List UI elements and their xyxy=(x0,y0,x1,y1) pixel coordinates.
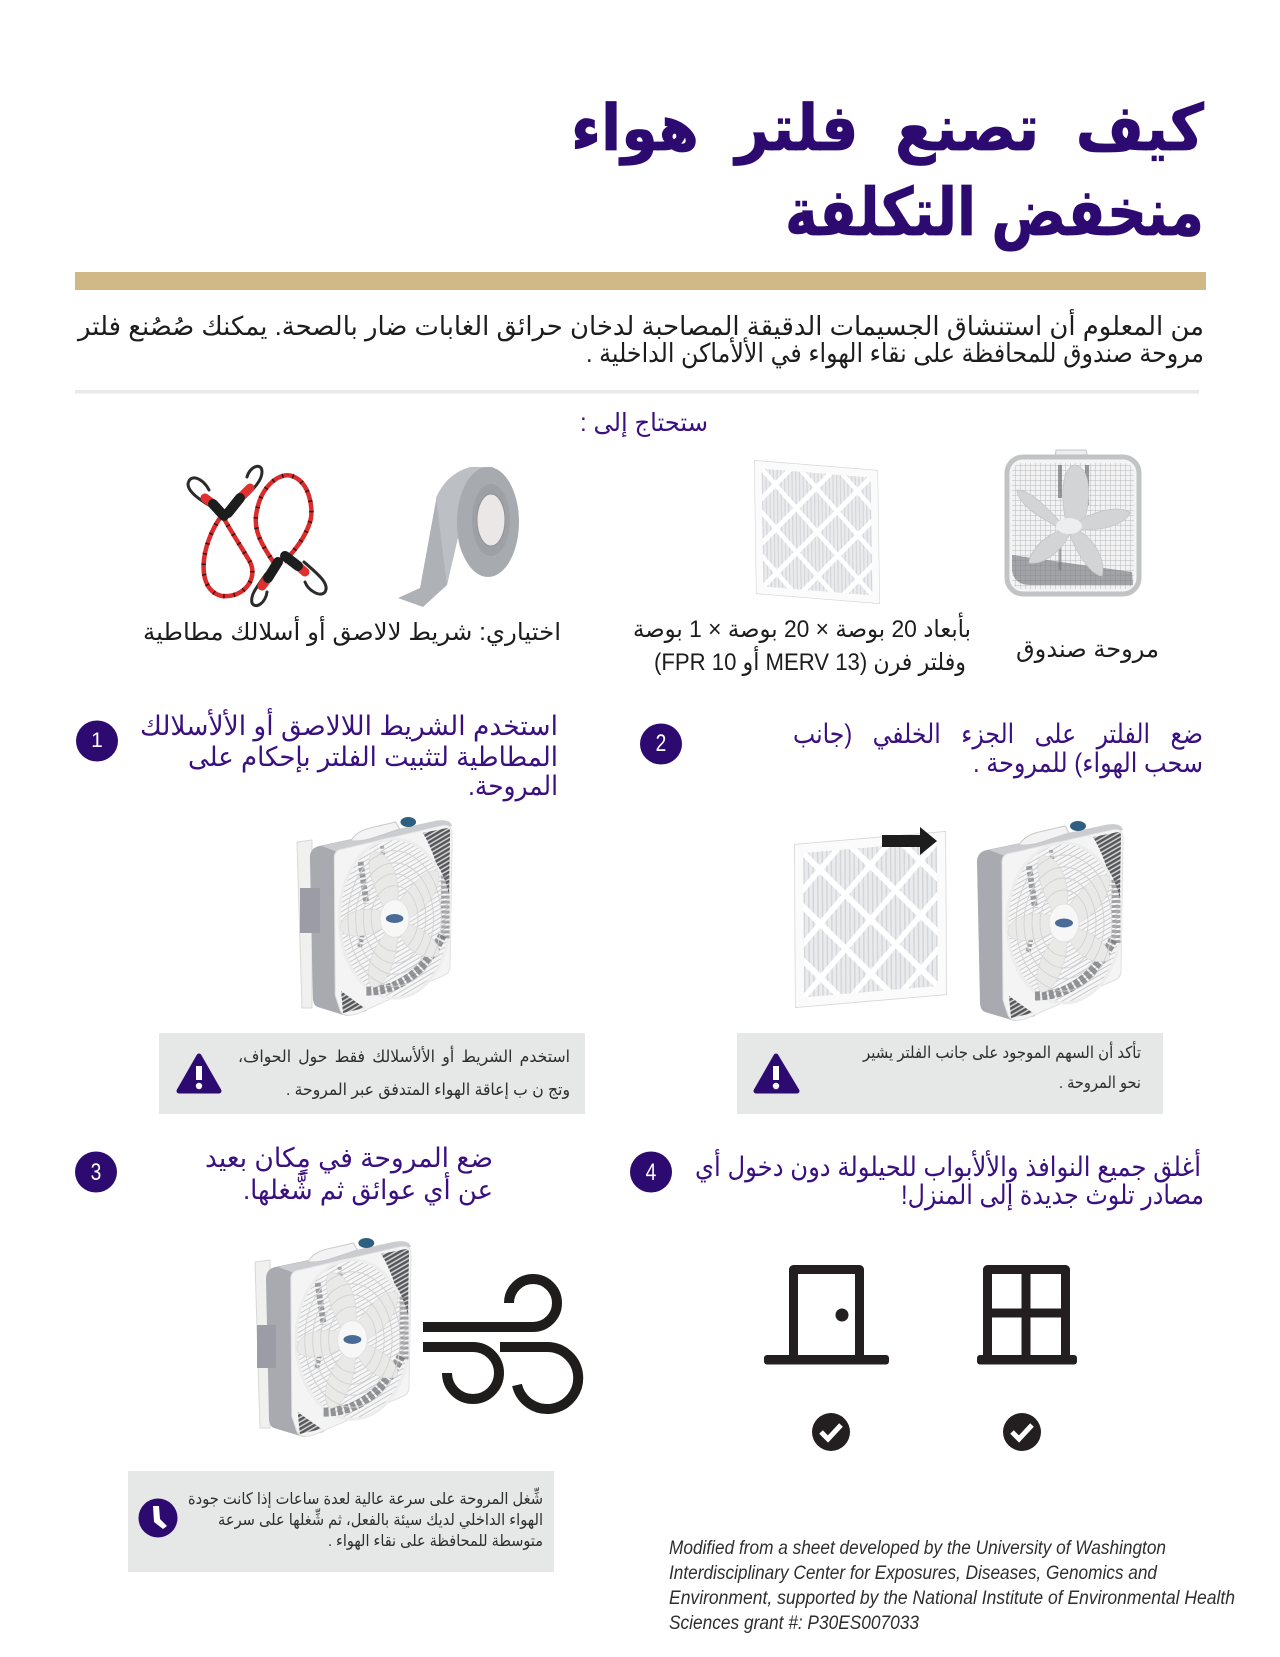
panel: materials xyxy=(143,450,1159,676)
warning box xyxy=(737,1033,1163,1114)
title: منخفض التكلفة xyxy=(785,175,1204,251)
materials heading: ستحتاج إلى : xyxy=(580,409,708,438)
panel: step 1 xyxy=(76,707,585,1114)
step 2 instruction: ضع الفلتر على الجزء الخلفي (جانب xyxy=(793,719,1203,750)
icon: check xyxy=(812,1413,850,1451)
panel: step 2 xyxy=(640,719,1203,1114)
material labels: وفلتر فرن (MERV 13 أو FPR 10) xyxy=(654,646,966,676)
warning text: وتج ن ب إعاقة الهواء المتدفق عبر المروحة . xyxy=(286,1081,570,1100)
fan with filter xyxy=(255,1238,411,1437)
title xyxy=(571,92,1205,251)
warning text: نحو المروحة . xyxy=(1059,1074,1141,1093)
note text: متوسطة للمحافظة على نقاء الهواء . xyxy=(328,1533,543,1551)
note text: الهواء الداخلي لديك سيئة بالفعل، ثم شِّغلها على سرعة xyxy=(218,1508,543,1530)
warning text xyxy=(238,1045,570,1100)
step 4 number: 4 xyxy=(646,1158,656,1186)
step 3 instruction: عن أي عوائق ثم شَّغلها. xyxy=(243,1170,493,1206)
material: bungee cords xyxy=(188,466,326,606)
panel: step 4 xyxy=(630,1148,1204,1451)
step 1 instruction: استخدم الشريط اللالاصق أو الألأسلالك xyxy=(140,707,558,742)
fan with filter attached xyxy=(297,817,452,1016)
step 1 number: 1 xyxy=(91,729,103,752)
source credit: Environment, supported by the National Institute of Environmental Health xyxy=(669,1587,1235,1609)
source credit: Sciences grant #: P30ES007033 xyxy=(669,1612,919,1634)
icon: warning triangle xyxy=(179,1056,219,1091)
step 1 instruction xyxy=(140,707,558,802)
intro paragraph xyxy=(76,308,1204,369)
step 3 instruction xyxy=(205,1143,493,1206)
step 2 number xyxy=(640,724,682,764)
icon: check xyxy=(1003,1413,1041,1451)
warning text: استخدم الشريط أو الألأسلالك فقط حول الحواف، xyxy=(238,1045,570,1067)
warning text xyxy=(862,1041,1141,1093)
step 1 instruction: المروحة. xyxy=(468,771,558,802)
material: air filter xyxy=(754,460,880,604)
step 4 instruction: مصادر تلوث جديدة إلى المنزل! xyxy=(901,1180,1204,1211)
intro paragraph: من المعلوم أن استنشاق الجسيمات الدقيقة المصاحبة لدخان حرائق الغابات ضار بالصحة. يمكنك صُصُنع فلتر xyxy=(76,308,1204,342)
source credit: Modified from a sheet developed by the University of Washington xyxy=(669,1537,1166,1559)
step 2 number: 2 xyxy=(656,729,666,757)
gold divider bar xyxy=(75,272,1206,290)
step 4 instruction xyxy=(695,1148,1204,1211)
panel: step 3 xyxy=(75,1143,578,1572)
step 3 number xyxy=(75,1152,117,1192)
intro paragraph: مروحة صندوق للمحافظة على نقاء الهواء في الألأماكن الداخلية . xyxy=(586,336,1204,369)
icon: warning triangle xyxy=(756,1056,797,1091)
note text xyxy=(188,1487,543,1551)
icon: door xyxy=(764,1270,889,1364)
icon: wind xyxy=(423,1279,578,1409)
step 3 instruction: ضع المروحة في مٍكان بعيد xyxy=(205,1143,493,1176)
material labels xyxy=(143,612,1159,676)
warning box xyxy=(159,1033,585,1114)
air filter with arrow xyxy=(794,827,947,1008)
material: duct tape xyxy=(398,467,519,607)
warning text: تأكد أن السهم الموجود على جانب الفلتر يشير xyxy=(862,1041,1141,1063)
note text: شِّغل المروحة على سرعة عالية لعدة ساعات إذا كانت جودة xyxy=(188,1487,543,1509)
material: box fan xyxy=(1007,450,1139,594)
material labels: مروحة صندوق xyxy=(1016,636,1159,663)
material labels: بأبعاد 20 بوصة × 20 بوصة × 1 بوصة xyxy=(633,612,971,643)
step 1 instruction: المطاطية لتثبيت الفلتر بإحكام على xyxy=(188,742,558,773)
icon: clock xyxy=(138,1498,178,1538)
step 4 number xyxy=(630,1152,672,1192)
arrow xyxy=(882,827,937,855)
note box xyxy=(128,1471,554,1572)
title: كيف تصنع فلتر هواء xyxy=(571,92,1205,166)
step 3 number: 3 xyxy=(91,1158,101,1186)
icon: window xyxy=(977,1269,1077,1364)
source credit: Interdisciplinary Center for Exposures, Diseases, Genomics and xyxy=(669,1562,1158,1584)
step 2 instruction: سحب الهواء) للمروحة . xyxy=(973,748,1203,779)
box fan xyxy=(977,821,1123,1021)
material labels: اختياري: شريط لالاصق أو أسلالك مطاطية xyxy=(143,616,561,646)
step 1 number xyxy=(76,720,118,762)
step 4 instruction: أغلق جميع النوافذ والألأبواب للحيلولة دون دخول أي xyxy=(695,1148,1201,1183)
source credit xyxy=(669,1537,1235,1634)
step 2 instruction xyxy=(793,719,1203,779)
